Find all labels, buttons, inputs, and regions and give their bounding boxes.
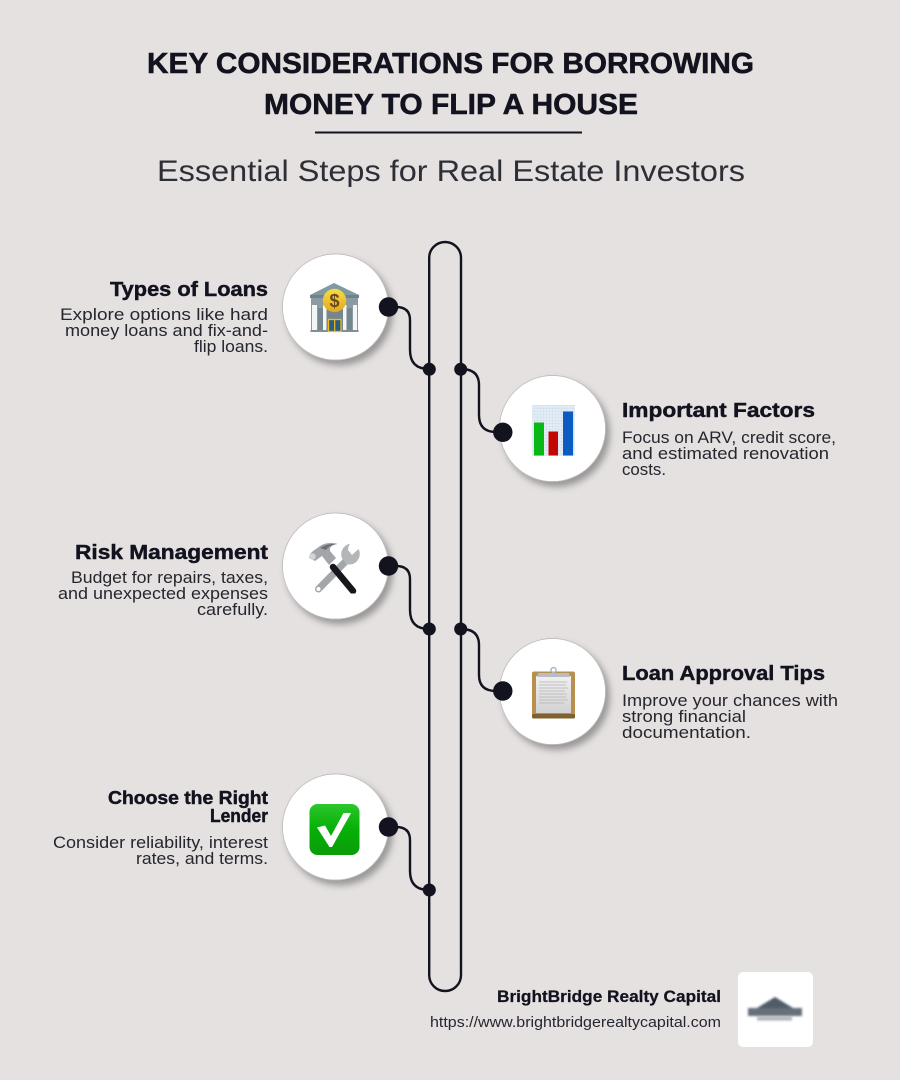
icon: clipboard [532,668,575,718]
text: loan approval tips: Improve your chances with [622,692,838,710]
icon: hammer and wrench [309,543,360,591]
text: types of loans: flip loans. [194,338,268,356]
text: risk management: Budget for repairs, taxes, [71,569,268,587]
circle: risk management [282,513,388,619]
text: important factors: Focus on ARV, credit score, [622,429,836,447]
connector: types of loans [388,307,429,369]
heading: important factors: Important Factors [622,399,815,422]
panel: loan approval tips [454,622,838,744]
title: MONEY TO FLIP A HOUSE [264,89,638,121]
company name: BrightBridge Realty Capital [497,988,721,1006]
title: KEY CONSIDERATIONS FOR BORROWING [147,48,754,80]
icon: bank with dollar coin: $ [329,291,340,311]
circle: types of loans [282,254,388,360]
text: loan approval tips: documentation. [622,724,751,742]
circle: choose the right lender [282,774,388,880]
text: important factors: and estimated renovation [622,445,829,463]
node: rail joint [454,622,467,636]
node: rail joint [423,622,436,636]
text: important factors: costs. [622,461,666,479]
panel: types of loans [60,254,436,376]
circle: loan approval tips [500,638,606,744]
panel: choose the right lender [53,774,436,896]
heading: choose the right lender: Lender [210,806,268,826]
node: risk management [379,556,398,576]
company url: https://www.brightbridgerealtycapital.com [430,1015,721,1031]
text: risk management: and unexpected expenses [58,585,268,603]
heading: choose the right lender [108,788,268,826]
connector: loan approval tips [461,629,503,691]
node: rail joint [423,363,436,376]
heading: risk management: Risk Management [75,541,268,564]
icon: green check mark [310,804,360,855]
icon: bar chart [532,405,575,456]
text: types of loans [60,306,268,356]
title [147,48,754,121]
icon: bank with dollar coin [310,283,359,332]
text: types of loans: Explore options like hard [60,306,268,324]
footer: company details [430,988,721,1031]
panel: important factors [454,363,836,482]
text: risk management [58,569,268,619]
connector: important factors [461,369,503,432]
text: risk management: carefully. [197,601,268,619]
central rail [429,242,461,991]
text: loan approval tips [622,692,838,742]
text: loan approval tips: strong financial [622,708,746,726]
node: important factors [493,423,512,442]
heading: loan approval tips: Loan Approval Tips [622,662,825,685]
heading: types of loans: Types of Loans [110,278,268,301]
circle: important factors [500,376,606,482]
heading: choose the right lender: Choose the Right [108,788,268,808]
text: choose the right lender: rates, and terms. [136,850,268,868]
node: loan approval tips [493,681,512,701]
connector: risk management [388,566,429,629]
text: choose the right lender [53,834,269,868]
node: choose the right lender [379,817,398,837]
text: important factors [622,429,836,479]
node: rail joint [423,884,436,896]
subtitle: Essential Steps for Real Estate Investors [157,155,745,188]
node: rail joint [454,363,467,376]
text: types of loans: money loans and fix-and- [65,322,268,340]
text: choose the right lender: Consider reliability, interest [53,834,269,852]
logo [738,972,813,1047]
node: types of loans [379,297,398,317]
panel: risk management [58,513,436,636]
connector: choose the right lender [388,827,429,890]
